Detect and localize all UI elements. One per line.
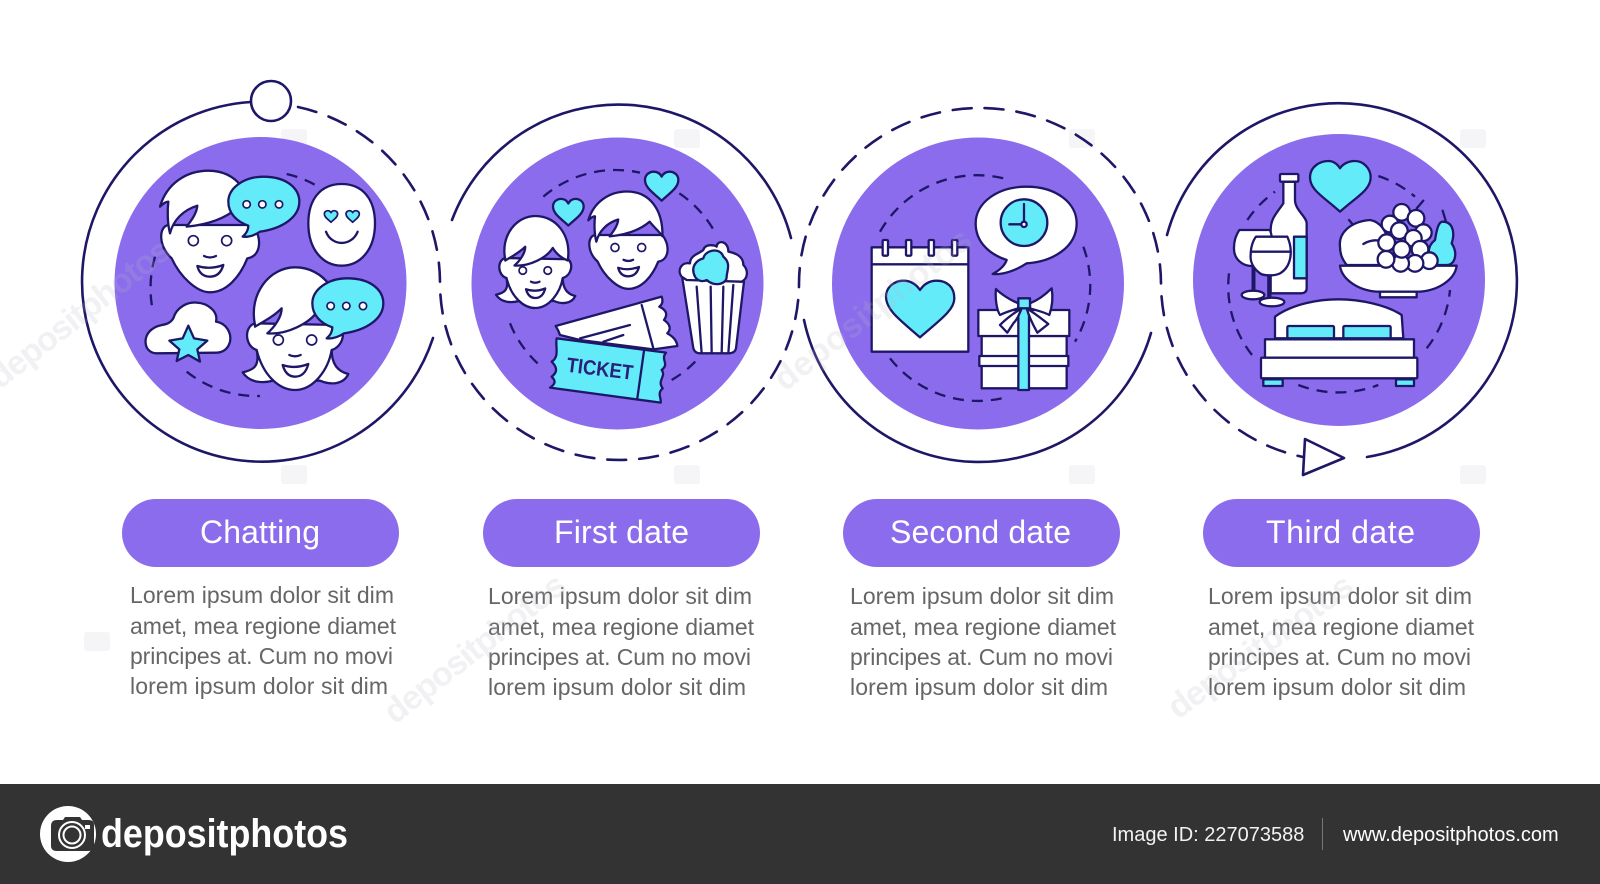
image id: Image ID: 227073588 [1112,824,1304,846]
icon group: chatting [146,171,383,396]
text block: chatting: amet, mea regione diamet [130,613,397,639]
text block: third date: Lorem ipsum dolor sit dim [1208,583,1472,609]
text block: first date [488,583,755,700]
icon: wine glasses [1234,230,1291,306]
icon: fruit bowl [1340,201,1457,297]
footer bar [0,784,1600,884]
icon: speech bubble with clock [976,187,1077,274]
text block: first date: amet, mea regione diamet [488,614,755,640]
text block: third date: lorem ipsum dolor sit dim [1208,674,1466,700]
text block: second date: lorem ipsum dolor sit dim [850,674,1108,700]
text block: chatting: Lorem ipsum dolor sit dim [130,582,394,608]
logo wordmark: depositphotos [101,812,348,856]
icon: calendar with heart [872,240,968,352]
divider [1322,818,1323,850]
icon: cloud with star [146,303,230,362]
icon: popcorn bucket [680,242,747,353]
panel: second date purple disc [832,138,1124,430]
text block: third date [1208,583,1475,700]
icon: front ticket: TICKET [565,354,635,385]
text block: third date: principes at. Cum no movi [1208,644,1471,670]
solid ring: third date [1167,103,1517,457]
icon group: first date [496,170,747,403]
pill heading: Chatting: Chatting [200,514,320,550]
icon: girl head [243,267,348,390]
solid ring: first date [452,105,791,238]
pill heading: Second date: Second date [890,514,1071,550]
pill heading: First date [483,499,760,567]
pill heading: Chatting [122,499,399,567]
icon: large heart [645,172,678,201]
pill heading: Third date [1203,499,1480,567]
text block: chatting: lorem ipsum dolor sit dim [130,673,388,699]
icon: girl head [496,216,575,308]
panel: chatting purple disc [114,137,406,429]
icon: boy head [160,171,259,292]
text block: third date: amet, mea regione diamet [1208,614,1475,640]
watermark text: depositphotos [377,566,573,731]
website url: www.depositphotos.com [1342,824,1559,846]
text block: chatting [130,582,397,699]
icon: speech bubble two [312,278,383,338]
text block: chatting: principes at. Cum no movi [130,643,393,669]
solid ring: second date [804,320,1151,462]
solid ring: chatting [82,102,433,462]
start marker circle [251,81,291,121]
icon: speech bubble one [228,177,299,237]
panel: third date purple disc [1193,134,1485,426]
icon: boy head [588,192,668,289]
icon: gift box with bow [978,288,1069,390]
text block: second date: principes at. Cum no movi [850,644,1113,670]
icon: back ticket [556,297,677,349]
watermark text [0,221,1361,731]
icon: heart [1310,161,1371,212]
text block: second date [850,583,1117,700]
icon group: second date [872,175,1090,401]
icon: wine bottle [1271,174,1307,293]
icon: camera logo [40,806,96,862]
text block: first date: lorem ipsum dolor sit dim [488,674,746,700]
icon: front ticket [550,338,666,403]
text block: second date: amet, mea regione diamet [850,614,1117,640]
watermark text: depositphotos [1160,566,1361,726]
end arrow [1303,439,1344,475]
icon: small heart [553,199,584,226]
text block: second date: Lorem ipsum dolor sit dim [850,583,1114,609]
text block: first date: Lorem ipsum dolor sit dim [488,583,752,609]
icon: smiling face with heart eyes [308,184,375,266]
pill heading: Third date: Third date [1266,514,1415,550]
icon: bed [1261,299,1417,386]
icon group: third date [1228,161,1457,392]
pill heading: First date: First date [554,514,689,550]
watermark text: depositphotos [767,221,979,398]
text block: first date: principes at. Cum no movi [488,644,751,670]
pill heading: Second date [843,499,1120,567]
panel: first date purple disc [472,138,764,430]
dashed connecting timeline [298,107,1303,460]
